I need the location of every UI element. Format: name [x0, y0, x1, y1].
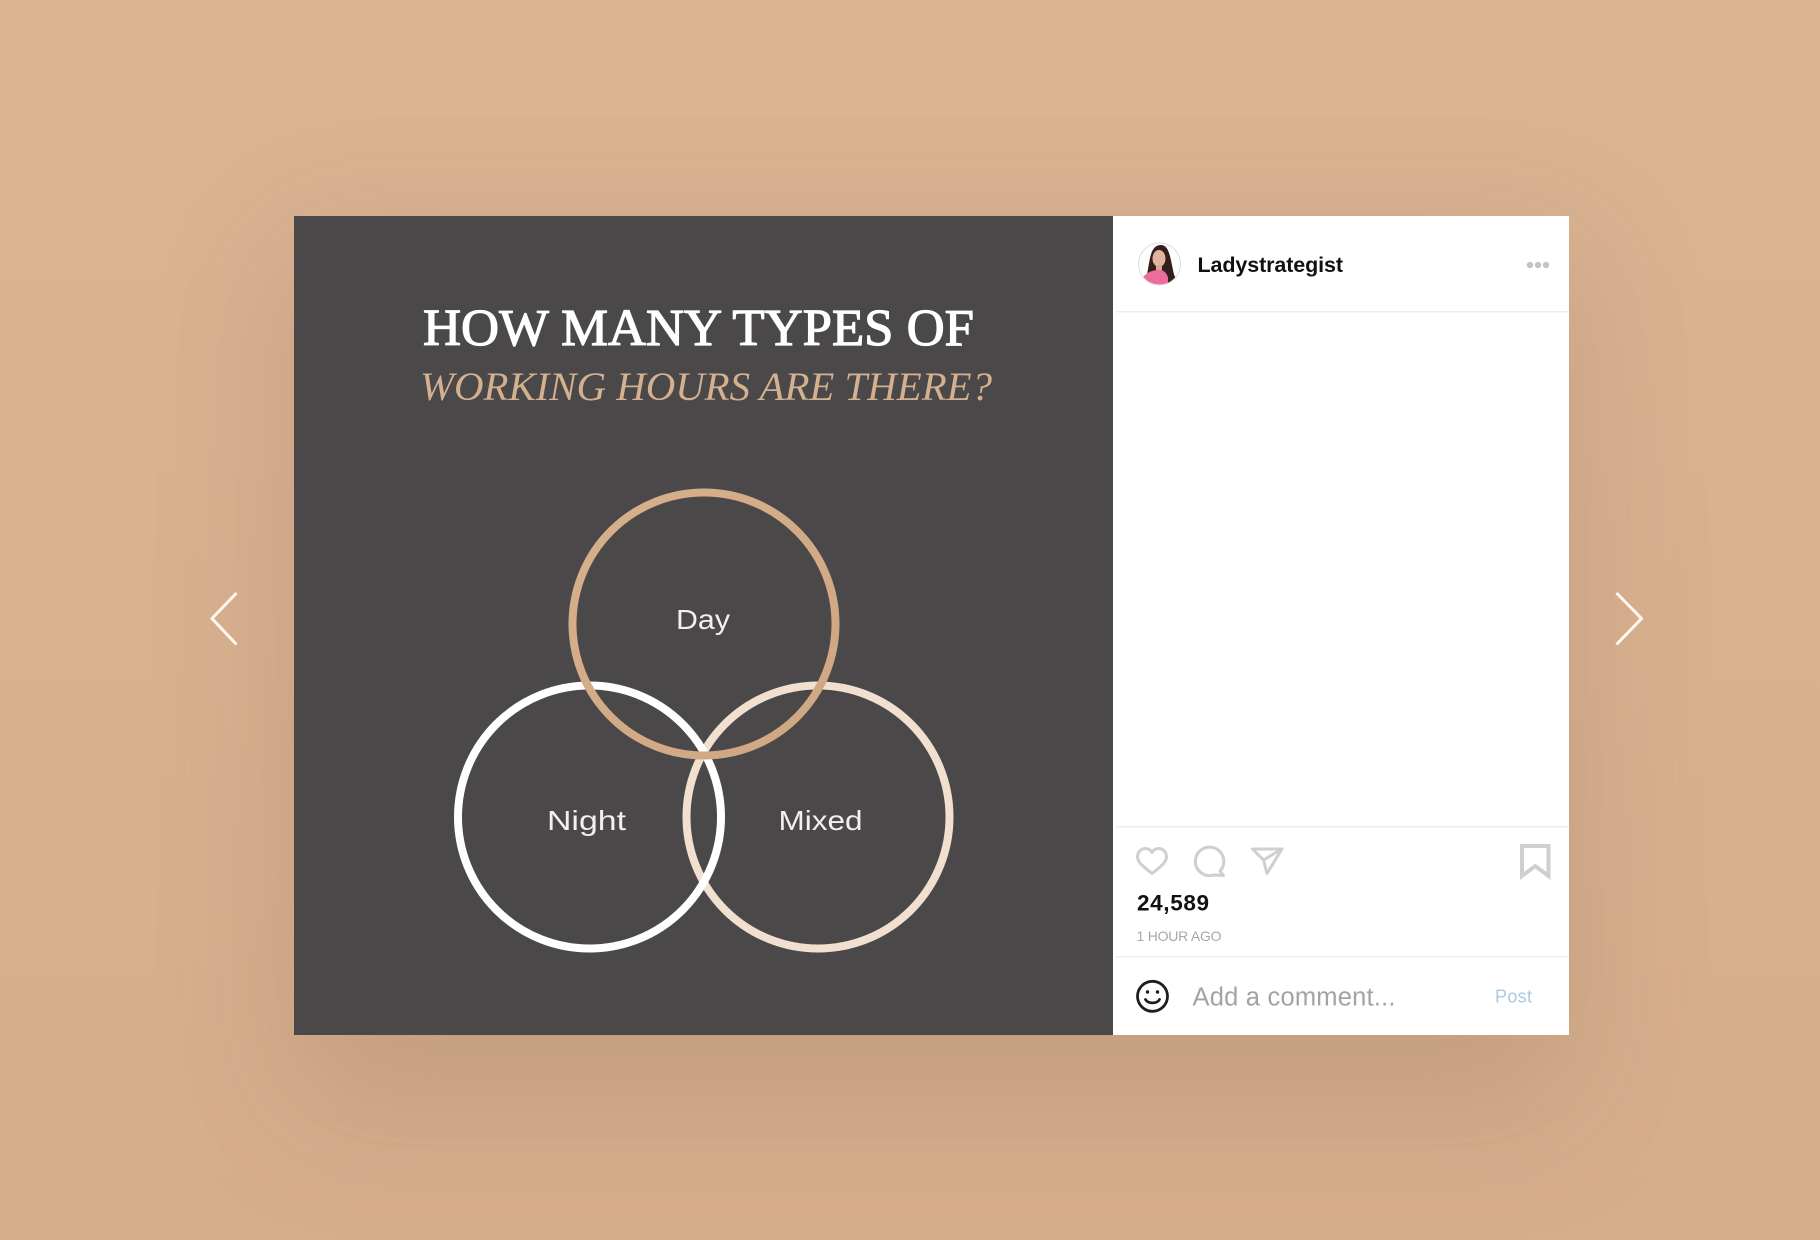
icon: smiley	[1138, 981, 1168, 1011]
circle: day	[572, 492, 836, 756]
icon: send	[1252, 849, 1282, 874]
panel: dark post image	[294, 216, 1113, 1035]
title line 2: WORKING HOURS ARE THERE?	[420, 364, 992, 409]
title line 1: HOW MANY TYPES OF	[423, 300, 974, 357]
label: night: Night	[547, 805, 626, 836]
icon: heart	[1138, 848, 1166, 874]
circle: night	[458, 686, 721, 948]
label: day: Day	[676, 604, 730, 635]
circle: mixed	[686, 686, 950, 948]
avatar	[1138, 243, 1180, 286]
icon: comment	[1195, 847, 1224, 876]
arrow: next	[1616, 593, 1642, 644]
timestamp: 1 HOUR AGO	[1136, 928, 1222, 944]
icon: more dots	[1527, 262, 1549, 268]
arrow: previous	[212, 593, 236, 644]
venn diagram	[458, 492, 950, 948]
panel: white post sidebar	[1113, 216, 1569, 1035]
likes count: 24,589	[1137, 890, 1209, 916]
username: Ladystrategist	[1198, 253, 1343, 277]
icon: bookmark	[1522, 846, 1548, 876]
label: mixed: Mixed	[778, 805, 862, 836]
instagram style post mockup	[210, 216, 1644, 1035]
comment placeholder: Add a comment...	[1192, 984, 1396, 1012]
post button: Post	[1495, 986, 1532, 1006]
